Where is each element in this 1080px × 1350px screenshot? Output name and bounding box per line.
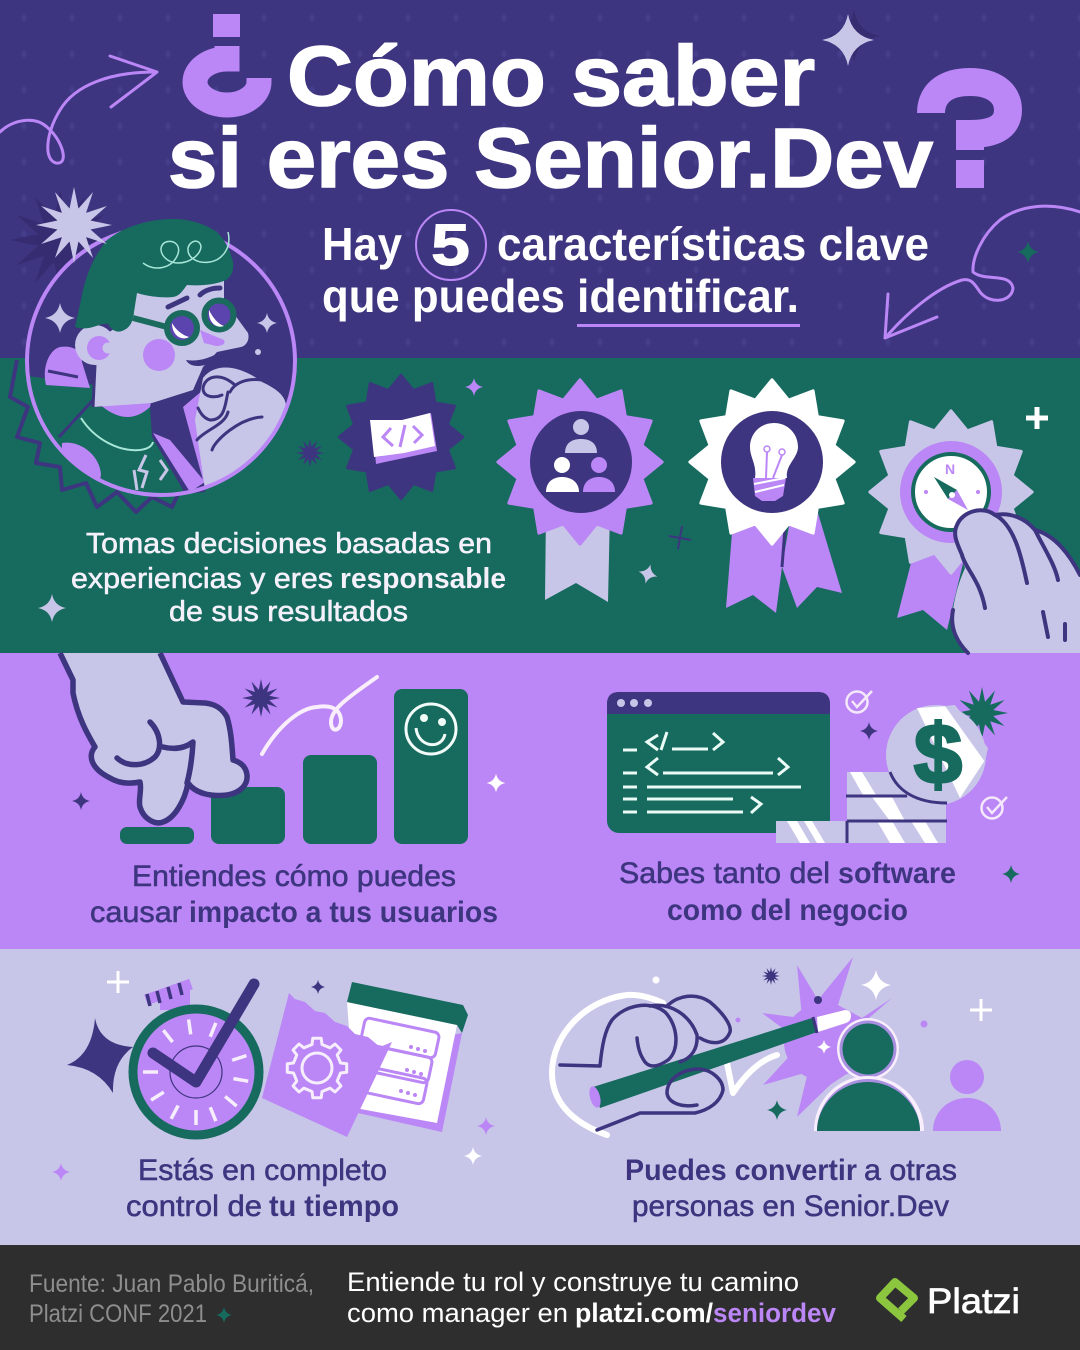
subtitle: Hay [322,218,402,270]
icon: character portrait [10,187,296,512]
arrow: right hand drawn [885,206,1080,338]
icon: green mentor person [814,1018,924,1131]
title: si eres Senior.Dev [168,111,933,205]
text: mentoring [625,1154,957,1223]
icon: hand holding wand [560,996,851,1130]
text: time control: control de [126,1190,262,1223]
icon: code window [607,692,830,833]
icon: footer sparkle [216,1307,232,1323]
icon: stopwatch [133,983,259,1135]
callout: number five in circle [416,210,486,280]
icon: navy star [242,679,280,717]
icon: book badge [339,375,463,499]
icon: hand on stairs [60,653,247,823]
badge: compass: N [945,461,955,477]
icon: small sparkle [465,378,483,396]
text: footer call to action: seniordev [713,1298,836,1328]
text: mentoring: personas en Senior.Dev [632,1190,949,1223]
text: time control [126,1154,399,1223]
icon: Platzi logo: Platzi [927,1282,1020,1321]
text: source: Fuente: Juan Pablo Buriticá, [29,1270,314,1298]
text: decisions: responsable [340,563,506,595]
badge: compass [870,411,1032,630]
title [168,29,933,205]
icon: top sparkle [822,10,880,66]
icon: coins stack [776,687,1008,843]
icon: purple person [933,1060,1001,1131]
text: mentoring: Puedes convertir [625,1154,857,1187]
badge: team people [498,380,662,602]
text: mentoring: a otras [864,1154,957,1187]
subtitle: identificar. [577,270,799,322]
icon: green sparkle right [1017,241,1039,263]
icon: sparkle left [38,594,66,622]
icon: sparkle green section [636,562,660,586]
icon: check circle bottom [982,797,1007,818]
text: footer call to action: como manager en [347,1298,568,1328]
panel: lavender section background [0,949,1080,1245]
icon: hand on compass [952,510,1080,653]
arrow: top left hand drawn [0,56,157,163]
text: footer call to action: platzi.com/ [575,1298,713,1328]
icon: dark cross [669,526,691,549]
text: time control: tu tiempo [269,1190,399,1223]
icon: chalk circle and check [552,995,777,1135]
chart: growing bars [120,689,468,844]
icon: small navy star [296,439,324,467]
icon: green sparkle code [1002,865,1020,883]
icon: white plus [1026,407,1048,429]
panel: green section background [0,358,1080,653]
icon: gear sheet [262,993,392,1137]
text: decisions: de sus resultados [169,596,408,628]
callout: number five in circle: 5 [431,213,470,278]
text: software and business: software [838,857,956,890]
icon: smiley [406,704,456,754]
icon: white plus lavender [107,971,129,993]
panel: purple section background [0,653,1080,949]
text: software and business: Sabes tanto del [619,857,830,890]
text: impact: causar [90,896,182,929]
panel: footer background [0,1245,1080,1350]
icon: navy sparkle [72,792,90,810]
icon: white squiggle [262,677,377,754]
icon: decorations right [652,967,992,1120]
icon: coins stack: $ [914,707,962,801]
text: time control: Estás en completo [138,1154,387,1187]
panel: header background [0,0,1080,358]
text: footer call to action: Entiende tu rol y construye tu camino [347,1267,799,1297]
text: source: Platzi CONF 2021 [29,1300,207,1328]
text: software and business: como del negocio [667,894,908,927]
text: impact: impacto a tus usuarios [189,896,498,929]
icon: opening question mark [195,14,259,105]
text: impact: Entiendes cómo puedes [132,860,456,893]
text: decisions [71,528,506,628]
icon: check circle top [846,691,872,712]
text: source [29,1270,314,1328]
icon: white sparkle [486,774,506,792]
icon: server document [347,982,468,1132]
title: Cómo saber [287,29,815,123]
text: impact [90,860,498,929]
icon: small sparkles lavender left [52,980,495,1181]
subtitle: características clave [497,218,929,270]
icon: Platzi logo [880,1282,1020,1321]
text: decisions: Tomas decisiones basadas en [86,528,492,560]
subtitle [322,210,929,327]
icon: navy big sparkle [67,1018,133,1093]
text: footer call to action [347,1267,836,1328]
icon: closing question mark [931,82,1008,188]
subtitle: que puedes [322,270,565,322]
icon: magic burst [762,957,900,1117]
icon: navy sparkle code [860,722,878,740]
text: software and business [619,857,956,927]
badge: light bulb [690,380,854,613]
text: decisions: experiencias y eres [71,563,333,595]
